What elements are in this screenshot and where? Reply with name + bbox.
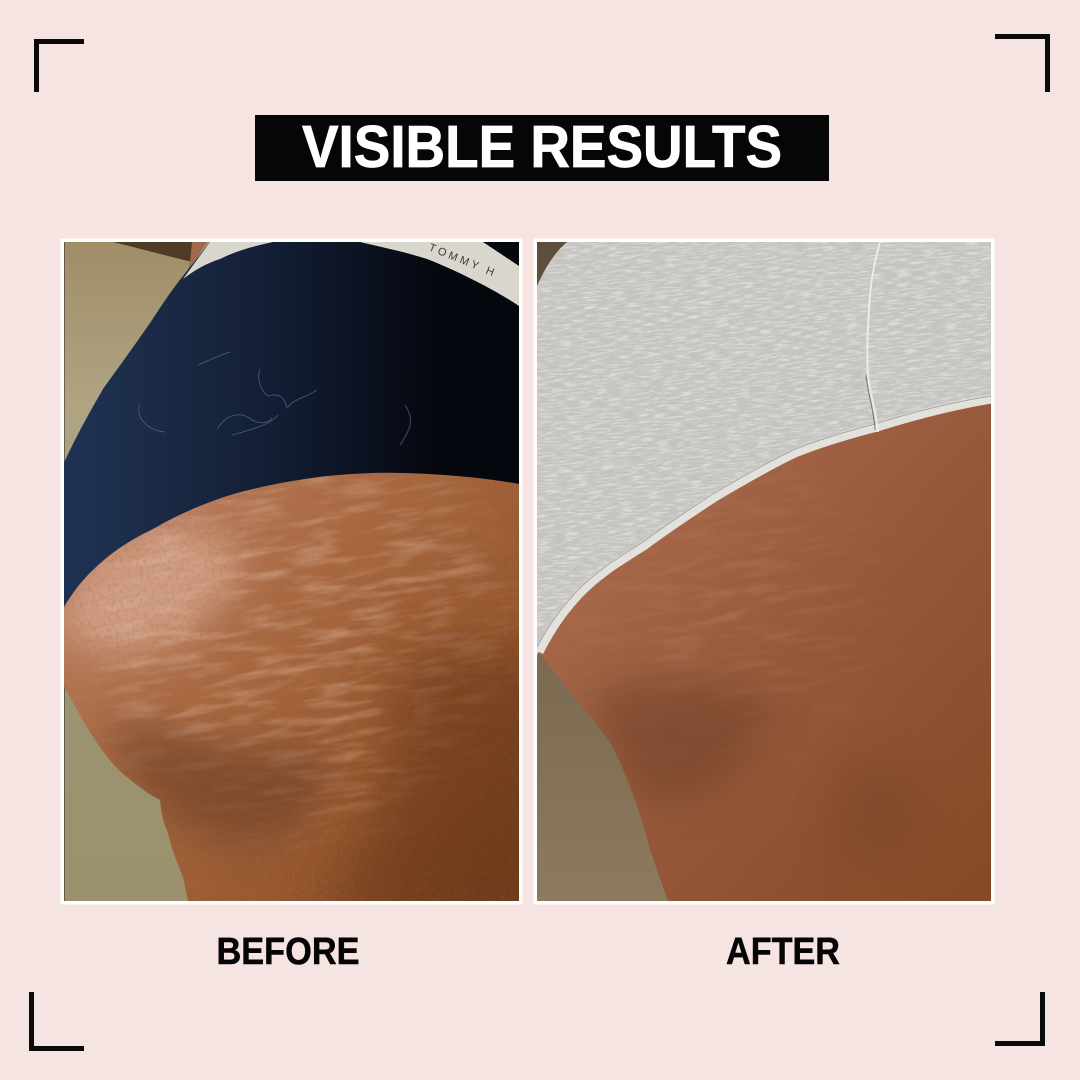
fabric texture <box>537 242 991 655</box>
panel: before photo: TOMMY H <box>427 242 499 280</box>
grey underwear <box>537 242 991 655</box>
waistband <box>183 242 519 306</box>
skin: after <box>539 404 991 901</box>
navy underwear <box>64 242 519 607</box>
label: after: AFTER <box>726 931 840 973</box>
underwear trim <box>539 399 991 652</box>
stretch mark texture: before <box>96 476 510 844</box>
side seam <box>867 242 880 432</box>
shadow area: before <box>105 726 322 844</box>
corner bracket: top left <box>36 42 84 92</box>
panel: after photo <box>534 238 994 904</box>
corner bracket: top right <box>995 36 1048 92</box>
skin: before <box>64 472 519 901</box>
corner bracket: bottom right <box>995 992 1042 1044</box>
stretch mark texture: after <box>630 534 822 690</box>
title: VISIBLE RESULTS <box>302 114 782 180</box>
lint marks <box>139 352 410 445</box>
label: before: BEFORE <box>216 931 360 973</box>
panel: before photo <box>60 238 522 904</box>
corner bracket: bottom left <box>32 992 84 1048</box>
shadow area: after <box>590 681 775 802</box>
